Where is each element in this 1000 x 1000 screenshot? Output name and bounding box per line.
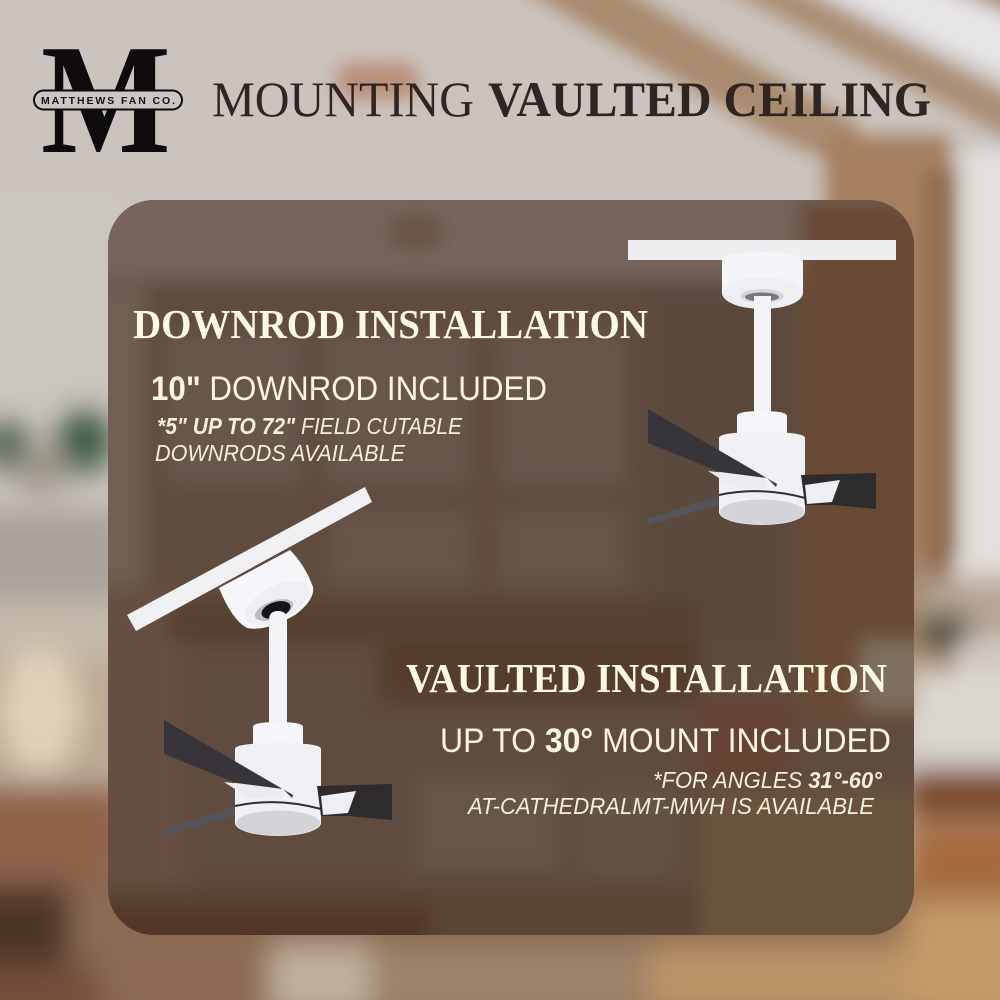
logo name pill: MATTHEWS FAN CO.: [41, 95, 175, 107]
downrod: [754, 296, 771, 414]
fan motor: [719, 411, 805, 525]
title: [212, 71, 931, 127]
downrod included text: 10" DOWNROD INCLUDED: [151, 370, 547, 408]
logo name pill: [34, 90, 182, 110]
downrod note: DOWNRODS AVAILABLE: [155, 440, 406, 466]
fan blades: [647, 409, 876, 525]
heading: downrod installation: DOWNROD INSTALLATION: [133, 301, 648, 347]
fan motor: [235, 722, 321, 836]
downrod note: *5" UP TO 72" FIELD CUTABLE: [157, 413, 463, 439]
vaulted note: [466, 767, 883, 819]
canopy: [722, 252, 803, 309]
translucent brown panel: [108, 200, 914, 935]
vaulted note: AT-CATHEDRALMT-MWH IS AVAILABLE: [466, 793, 875, 819]
angled canopy: [219, 550, 316, 634]
vaulted mount text: UP TO 30° MOUNT INCLUDED: [440, 722, 891, 760]
title: MOUNTING: [212, 71, 474, 127]
title: VAULTED CEILING: [488, 71, 931, 127]
logo: Matthews Fan Co.: [34, 13, 182, 186]
ceiling bar: [628, 240, 896, 260]
downrod: [269, 611, 287, 725]
downrod note: [155, 413, 463, 466]
fan blades: [163, 720, 392, 836]
heading: vaulted installation: VAULTED INSTALLATION: [406, 655, 887, 701]
vaulted note: *FOR ANGLES 31°-60°: [653, 767, 883, 793]
sloped ceiling bar: [127, 487, 372, 631]
logo monogram M: M: [41, 13, 171, 186]
fan diagram: vaulted angled mount: [127, 487, 392, 836]
fan diagram: flat ceiling downrod: [628, 240, 896, 525]
